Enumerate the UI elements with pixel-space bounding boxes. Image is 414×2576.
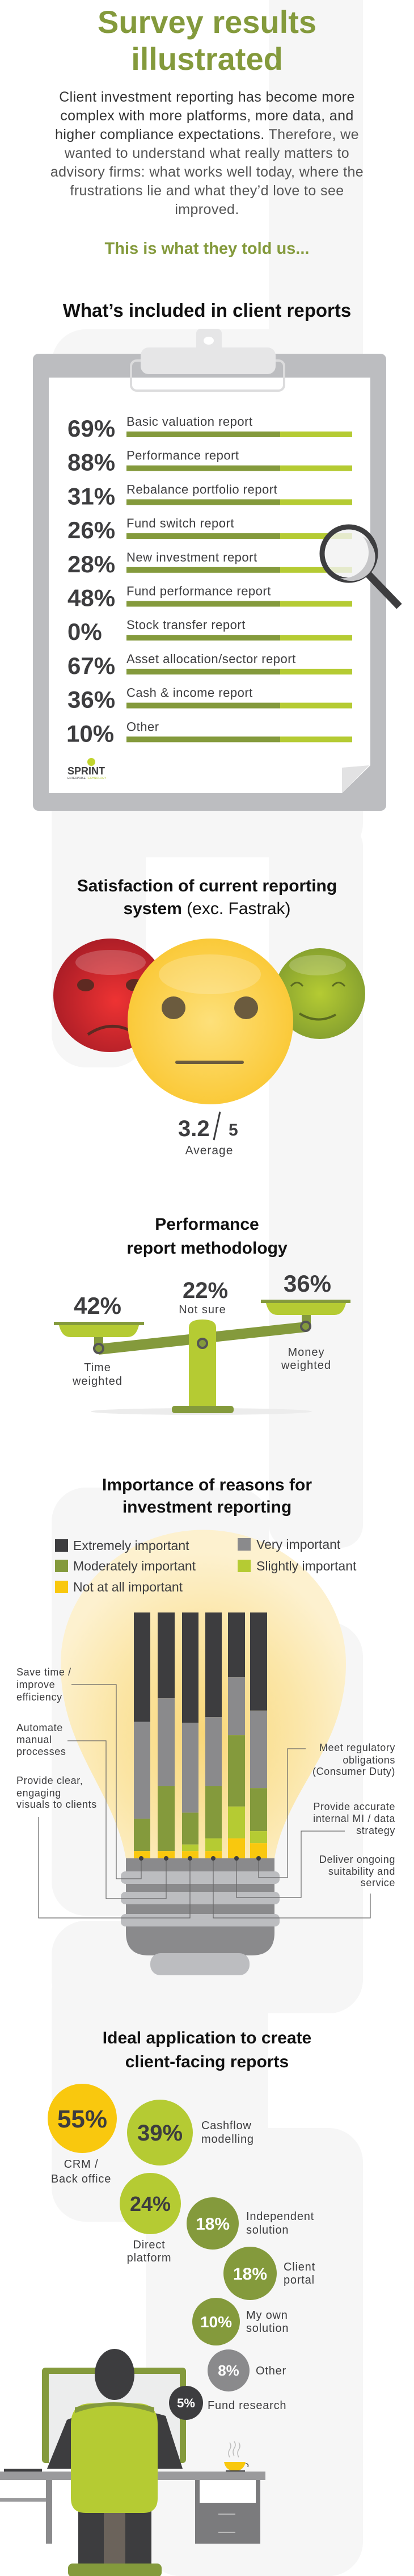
title: Survey results [98, 4, 316, 40]
icon: bulb socket [121, 1858, 280, 1975]
panel: performance methodology: weighted [72, 1375, 122, 1388]
panel: clipboard chart: Basic valuation report [126, 414, 253, 429]
panel: ideal application: Client [284, 2261, 315, 2273]
intro text: complex with more platforms, more data, and [60, 108, 354, 124]
heading: importance: investment reporting [122, 1498, 292, 1517]
bubbles: 18% [196, 2215, 230, 2234]
heading: what's included: What’s included in client reports [63, 300, 351, 321]
heading: satisfaction [77, 877, 337, 918]
panel: clipboard chart: 88% [67, 449, 115, 476]
legend: Moderately important [73, 1559, 196, 1573]
heading: performance: report methodology [126, 1239, 288, 1258]
icon: bulb glow [61, 1530, 346, 1858]
panel: importance lightbulb: strategy [356, 1825, 395, 1836]
bubbles: 55% [57, 2105, 107, 2133]
icon: neutral face [128, 939, 293, 1104]
panel: performance methodology: Time [84, 1362, 111, 1374]
labels: Provide clear, [16, 1775, 83, 1786]
panel: ideal application: Cashflow [201, 2120, 252, 2132]
intro text: Client investment reporting has become more [59, 89, 355, 105]
panel: clipboard chart: Fund switch report [126, 516, 234, 530]
icon: happy face [274, 948, 365, 1039]
panel: importance lightbulb [16, 1476, 395, 1975]
panel: clipboard chart: 67% [67, 652, 115, 679]
panel: performance methodology: 42% [74, 1292, 121, 1319]
panel: ideal application [0, 2029, 315, 2576]
panel: ideal application: Direct [133, 2239, 166, 2251]
panel: performance methodology [54, 1215, 350, 1415]
panel: ideal application: platform [127, 2252, 171, 2264]
panel: ideal application: Fund research [208, 2399, 286, 2412]
bubbles: 18% [233, 2265, 267, 2284]
panel: ideal application: My own [246, 2309, 288, 2322]
panel: clipboard chart: 26% [67, 517, 115, 543]
panel: clipboard chart: 69% [67, 415, 115, 442]
intro text: advisory firms: what works well today, where the [50, 164, 364, 180]
panel: clipboard chart: Performance report [126, 449, 239, 463]
heading: performance: Performance [155, 1215, 259, 1234]
bubbles: 24% [130, 2192, 171, 2215]
panel: ideal application: solution [246, 2322, 289, 2335]
intro text [50, 89, 364, 217]
panel: clipboard chart: 28% [67, 551, 115, 577]
score: 3.2 [178, 1116, 210, 1141]
panel: performance methodology: Not sure [179, 1304, 226, 1316]
labels: engaging [16, 1787, 61, 1799]
intro text: wanted to understand what really matters to [65, 145, 349, 161]
logo: sprint: ENTERPRISE TECHNOLOGY [67, 777, 107, 780]
legend: Slightly important [256, 1559, 357, 1573]
panel: ideal application: Back office [51, 2173, 111, 2185]
labels: manual [16, 1734, 52, 1745]
heading: satisfaction: Satisfaction of current reporting [77, 877, 337, 895]
logo: sprint [67, 758, 107, 780]
intro text: improved. [175, 202, 239, 217]
panel: performance methodology: 36% [284, 1270, 331, 1297]
panel: importance lightbulb: suitability and [328, 1866, 395, 1877]
icon: magnifier [322, 527, 399, 606]
score [178, 1112, 238, 1157]
labels: efficiency [16, 1691, 62, 1703]
panel: ideal application: Independent [246, 2210, 314, 2223]
heading: satisfaction: system (exc. Fastrak) [123, 899, 291, 918]
title: illustrated [131, 41, 283, 77]
panel: clipboard chart: 0% [67, 618, 102, 645]
panel: clipboard chart: Stock transfer report [126, 618, 246, 632]
panel: importance lightbulb: service [361, 1877, 395, 1888]
labels: improve [16, 1679, 55, 1690]
labels: Automate [16, 1722, 63, 1733]
panel: ideal application: solution [246, 2224, 289, 2236]
panel: importance lightbulb: obligations [343, 1754, 395, 1766]
panel: importance lightbulb: internal MI / data [313, 1813, 395, 1824]
leader lines [39, 1685, 370, 1918]
panel: importance lightbulb: Provide accurate [313, 1801, 395, 1812]
panel: clipboard chart: Cash & income report [126, 686, 253, 700]
panel: importance lightbulb: (Consumer Duty) [312, 1766, 395, 1777]
panel: clipboard chart: Other [126, 719, 159, 734]
panel: clipboard chart: Fund performance report [126, 584, 271, 598]
icon: clip [131, 329, 284, 391]
heading: ideal application [103, 2029, 311, 2071]
score: Average [185, 1144, 233, 1157]
labels: visuals to clients [16, 1799, 97, 1810]
panel: clipboard chart: Asset allocation/sector report [126, 652, 296, 666]
panel: clipboard chart: 10% [66, 720, 114, 747]
illustration: person at desk [0, 2349, 265, 2576]
heading: performance [126, 1215, 288, 1258]
panel: performance methodology: 22% [183, 1278, 228, 1303]
bubbles: 39% [137, 2121, 183, 2146]
logo: sprint: SPRINT [67, 765, 105, 777]
panel: clipboard chart [33, 329, 402, 811]
panel: ideal application: portal [284, 2274, 315, 2286]
heading: importance: Importance of reasons for [102, 1476, 312, 1494]
panel: ideal application: CRM / [64, 2158, 98, 2171]
subheading: This is what they told us... [105, 240, 309, 258]
panel: performance methodology: weighted [281, 1359, 331, 1372]
score: 5 [229, 1121, 238, 1140]
chart: stacked bars [134, 1612, 267, 1858]
legend: Very important [256, 1537, 341, 1552]
icon: sad face [53, 939, 167, 1052]
labels [16, 1666, 97, 1810]
chart: scale [54, 1300, 350, 1415]
heading: ideal application: client-facing reports [125, 2053, 289, 2071]
legend: Extremely important [73, 1538, 189, 1553]
panel: performance methodology: Money [288, 1346, 325, 1359]
panel: clipboard chart: 31% [67, 483, 115, 509]
bubbles: 10% [200, 2313, 232, 2331]
bubbles: 5% [177, 2396, 195, 2410]
panel: clipboard chart: New investment report [126, 550, 257, 564]
legend [55, 1537, 357, 1594]
bubbles [48, 2084, 277, 2420]
panel: importance lightbulb: Deliver ongoing [319, 1854, 395, 1865]
panel: satisfaction [53, 877, 365, 1157]
intro text: frustrations lie and what they’d love to see [70, 183, 344, 199]
heading: importance [102, 1476, 312, 1517]
legend: Not at all important [73, 1580, 183, 1594]
rows [126, 432, 352, 742]
panel: ideal application: modelling [201, 2133, 254, 2146]
panel: clipboard chart: Rebalance portfolio report [126, 482, 277, 496]
panel: clipboard chart: 36% [67, 686, 115, 713]
panel: importance lightbulb: Meet regulatory [319, 1742, 395, 1753]
panel: ideal application: Other [256, 2365, 286, 2377]
labels: processes [16, 1746, 66, 1757]
labels: Save time / [16, 1666, 71, 1678]
intro text: higher compliance expectations. Therefore, we [55, 127, 359, 143]
bubbles: 8% [218, 2362, 239, 2379]
title [98, 4, 316, 77]
panel: clipboard chart: 48% [67, 585, 115, 611]
heading: ideal application: Ideal application to create [103, 2029, 311, 2047]
